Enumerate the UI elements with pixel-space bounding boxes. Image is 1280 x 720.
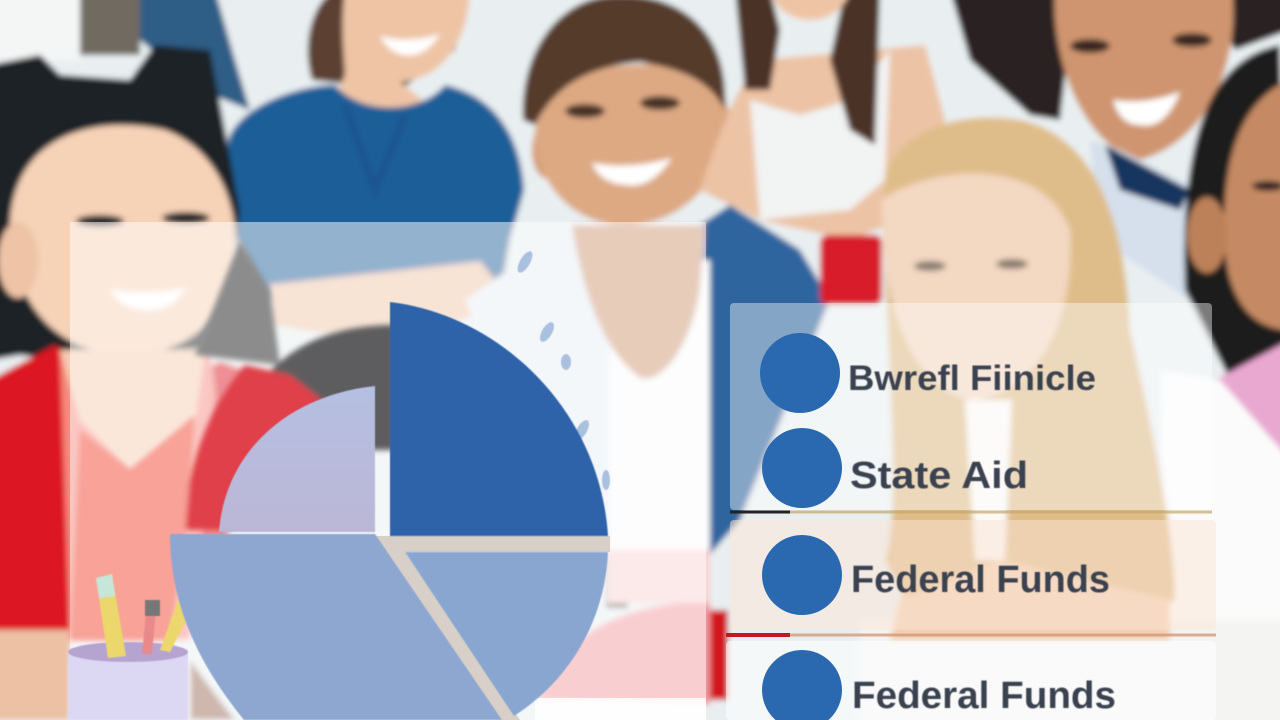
legend item: State Aid [762,428,1028,508]
pie slice: bottom left, largest [170,534,502,720]
legend item: State Aid: State Aid [850,455,1028,497]
legend item: Federal Funds (second): Federal Funds [852,675,1116,717]
pie slice: top left [219,386,375,532]
pie chart: funding shares [170,302,608,720]
legend item: Federal Funds (second) [762,650,1116,720]
pie slice: bottom right [405,552,608,716]
pie gap shading [375,536,610,720]
icon: pencil cup [68,574,188,720]
legend [760,333,1116,720]
frosted legend panels [726,303,1216,720]
legend item: Federal Funds: Federal Funds [851,559,1110,601]
overlay tints: darker chair, sleeve and shirt seen through panel [70,240,395,640]
legend item: first source [760,333,1096,413]
blue shirt print spots [515,249,610,490]
pie slice: top right [390,302,608,536]
frosted overlay panel behind chart [70,222,706,720]
legend item: first source: Bwrefl Fiinicle [848,359,1096,398]
legend item: Federal Funds [762,535,1110,615]
